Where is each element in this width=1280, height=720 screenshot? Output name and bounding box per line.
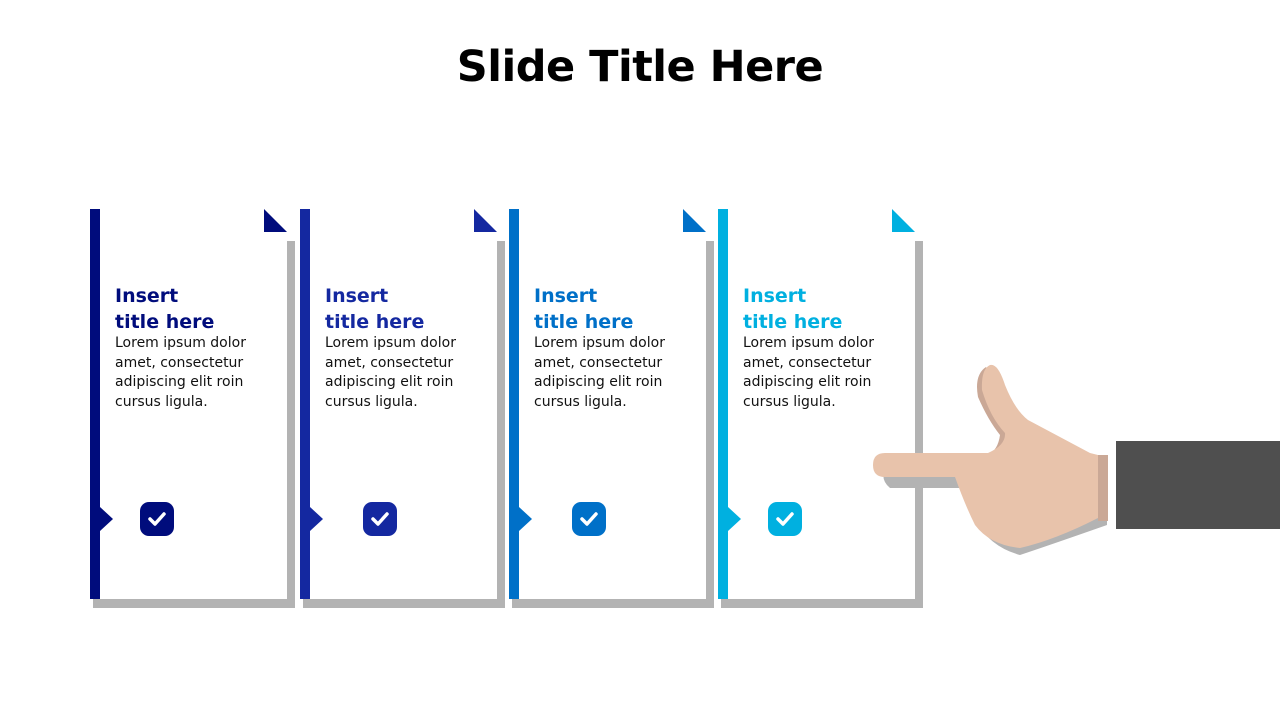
cuff: [1098, 455, 1108, 521]
text 3: Lorem ipsum dolor amet, consectetur adipiscing elit roin cursus ligula.: [534, 335, 665, 410]
heading 4: [743, 285, 842, 333]
text 4: Lorem ipsum dolor amet, consectetur adipiscing elit roin cursus ligula.: [743, 335, 874, 410]
arrow notch 3: [519, 507, 532, 531]
text 2: Lorem ipsum dolor amet, consectetur adipiscing elit roin cursus ligula.: [325, 335, 456, 410]
panel: card 2: [300, 209, 505, 608]
heading 2: Insert: [325, 285, 388, 307]
heading 1: Insert: [115, 285, 178, 307]
corner fold 1: [264, 209, 287, 232]
hand: [873, 365, 1098, 548]
arrow notch 2: [310, 507, 323, 531]
heading 3: [534, 285, 633, 333]
thumb back: [977, 367, 1010, 455]
sleeve: [1116, 441, 1280, 529]
heading 2: title here: [325, 311, 424, 333]
icon: check 1: [140, 502, 174, 536]
arrow notch 1: [100, 507, 113, 531]
icon: check 2: [363, 502, 397, 536]
title: Slide Title Here: [457, 42, 823, 92]
heading 3: title here: [534, 311, 633, 333]
icon: check 4: [768, 502, 802, 536]
heading 1: title here: [115, 311, 214, 333]
corner fold 2: [474, 209, 497, 232]
hand shadow: [887, 473, 1107, 555]
heading 4: Insert: [743, 285, 806, 307]
icon: check 3: [572, 502, 606, 536]
icon: pointing hand: [873, 364, 1280, 555]
heading 2: [325, 285, 424, 333]
corner fold 3: [683, 209, 706, 232]
heading 4: title here: [743, 311, 842, 333]
corner fold 4: [892, 209, 915, 232]
panel: card 3: [509, 209, 714, 608]
heading 3: Insert: [534, 285, 597, 307]
panel: card 4: [718, 209, 923, 608]
text 1: Lorem ipsum dolor amet, consectetur adipiscing elit roin cursus ligula.: [115, 335, 246, 410]
heading 1: [115, 285, 214, 333]
arrow notch 4: [728, 507, 741, 531]
panel: card 1: [90, 209, 295, 608]
